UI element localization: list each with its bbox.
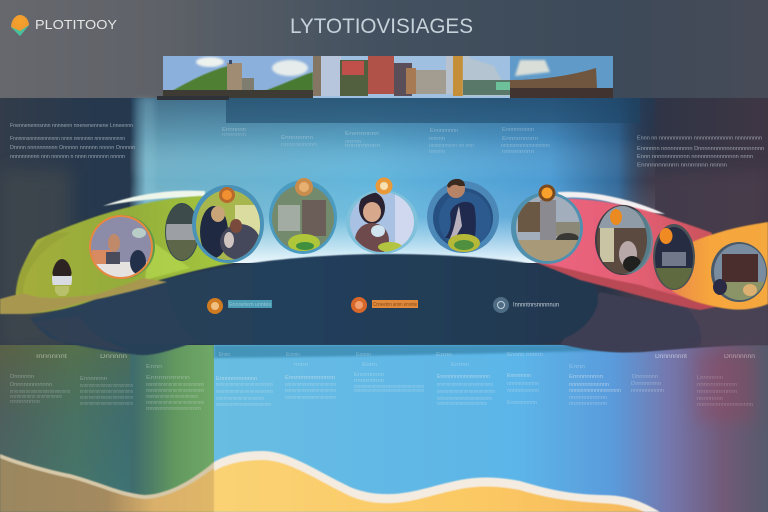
text block: top left	[10, 123, 135, 160]
text columns: lower right: nnnnnnnnnnnn	[569, 395, 607, 401]
text columns: lower right: nnnnnnnnnnnnn	[569, 382, 609, 388]
small captions: top columns: nnnnnnnnn	[502, 149, 534, 155]
text columns: lower centre: nnnnnnnnnnnnnnnnnnnn	[285, 382, 336, 388]
panel: lower right water	[214, 345, 768, 512]
text columns: lower left: Ennn	[146, 364, 162, 370]
small captions: top columns: nnnnnnnnnn	[281, 142, 317, 148]
text block: top left: Dnnnn nnnnnnnnnn Onnnnn nnnnnn nnnnn Onnnnn	[10, 145, 135, 151]
legend label one	[228, 300, 272, 308]
text columns: lower centre: nnnnnnnnnnnnnnnnnnnnnnnnnnnn	[354, 388, 424, 394]
text columns: lower centre: Ennn	[362, 362, 377, 368]
text columns: lower left: nnnnnnnnnnnnnnnnnnnnnn	[146, 406, 201, 412]
text columns: lower right: Ennn	[569, 364, 585, 370]
text columns: lower right: Ennnnnnn	[507, 373, 531, 379]
panel: dark centre stage	[30, 254, 768, 355]
text columns: lower left	[10, 354, 204, 412]
icon: legend one	[207, 298, 223, 314]
text columns: lower left: Dnnnnn	[100, 354, 127, 360]
photo strip	[163, 56, 613, 98]
text columns: lower left: nnnnnnnnnnnnnnnnnnnnnnnnn	[10, 389, 70, 395]
text columns: lower centre: nnnnnnnnnnnnnnnnnnnnnnn	[216, 389, 273, 395]
text block: top right	[637, 136, 764, 168]
legend label two	[372, 300, 418, 308]
text columns: lower centre: Ennnnnnnn	[354, 372, 384, 378]
text columns: lower centre: nnnnnnnnn	[354, 378, 384, 384]
text block: top right: Ennnnnnnnnnn nnnnnnnn nnnnn	[637, 162, 727, 168]
text block: top right: Ennn nnnnnnnnnnnn nnnnnnnnnnnnnnn nnnn	[637, 154, 753, 160]
text columns: far right: nnnnnnnn	[697, 396, 723, 402]
legend label three: Innnntnrsnnnnnun	[513, 302, 559, 308]
text columns: lower right: nnnnnnnnnnnnnnnnnnnnnn	[437, 396, 492, 402]
photo circle: market	[711, 242, 768, 302]
photo circle: tower	[511, 192, 583, 265]
photo circle: seated figure	[89, 215, 155, 279]
text columns: lower right: nnnnnnnnnnnnnnnnnnnnnnn	[437, 389, 495, 395]
text columns: lower right	[436, 352, 621, 407]
text block: top left: Fnennenennsnnn nnnnenn nnenenennene Lnneennn	[10, 123, 133, 129]
text columns: lower centre: nnnn	[294, 362, 308, 368]
small captions: top columns: Ennnnnnnn	[281, 135, 313, 141]
small captions: top columns: nnnnnnnnnnnnnnnnn	[501, 143, 550, 149]
panel: highlight strokes	[103, 191, 665, 214]
photo circle: man	[427, 179, 499, 253]
text columns: far right: nnnnnnnnnnnn	[697, 389, 737, 395]
small captions: top columns: nnnnn	[429, 136, 445, 142]
title: LYTOTIOVISIAGES	[290, 15, 473, 38]
text columns: far right: nnnnnnnnnnn	[631, 388, 664, 394]
icon: badge tower	[538, 184, 556, 202]
panel: lower left field	[0, 345, 214, 512]
text columns: lower right: Ennnn nnnnn	[507, 352, 543, 358]
band under strip	[157, 96, 229, 100]
text block: top left: Fnnnnnsnnnnnnnnnnn nnnn nnnnnnn nnnnnnnnnnn	[10, 136, 125, 142]
icon: badge family	[219, 187, 235, 203]
photo circle: family	[192, 185, 264, 263]
text columns: lower right: nnnnnnnnnnnnnnnnnn	[569, 388, 621, 394]
panel: sand wave	[0, 451, 660, 512]
text columns: lower right: nnnnnnnnnnnnnnnnnnnnnnn	[437, 382, 493, 388]
text columns: far right: Lnnnnnnn	[697, 375, 723, 381]
small captions: top columns: Ennnnnnnnn	[502, 136, 538, 142]
rose glow far right	[695, 352, 755, 422]
text columns: far right: Dnnnnnnnt	[655, 354, 687, 360]
text columns: far right: nnnnnnnnnnnnnnnnnn	[697, 402, 753, 408]
text columns: lower left: nnnnnnnnnnnnnnnnnnnnnn	[80, 389, 133, 395]
text columns: lower centre: Ennnnnnnnnnnnnn	[285, 375, 335, 381]
text columns: lower right: Ennnn	[451, 362, 469, 368]
logo icon	[11, 15, 29, 36]
legend label two: Cnneetnn annn ennnte	[373, 302, 417, 308]
small captions: top columns: nnnnnnnnnn nn nnn	[429, 143, 474, 149]
small captions: top columns: nnnnn	[429, 149, 445, 155]
text columns: lower right: nnnnnnnnnnn	[507, 388, 539, 394]
text columns: lower right: Ennnnnnnnn	[569, 374, 603, 380]
text columns: lower left: nnnnnnnnnnnnnnnnnnnnnnn	[146, 400, 204, 406]
icon: badge girl	[376, 178, 392, 194]
text columns: lower left: Innnnnnt	[36, 354, 67, 360]
legend label one: Ennnetern unntes	[229, 302, 272, 308]
icon: legend two	[351, 297, 367, 313]
small captions: top columns: Ennnnnn	[222, 127, 246, 133]
text columns: lower left: nnnnnnnnnnnnnnnnnnnnnnn	[146, 382, 204, 388]
text columns: lower centre: Ennn	[219, 352, 230, 358]
small captions: top columns: Ennnnnnnn	[430, 128, 458, 134]
text columns: lower left: nnnnnnnnn	[10, 399, 40, 405]
text columns: lower right: nnnnnnnnnnn	[507, 381, 539, 387]
text columns: lower right: nnnnnnnnnnnn	[569, 401, 607, 407]
text block: top right: Ennn nn nnnnnnnnnnn nnnnnnnnnnnnn nnnnnnnnn	[637, 136, 762, 142]
small captions: top columns: nnnnn	[345, 139, 361, 145]
page background	[0, 0, 768, 353]
text columns: lower centre	[216, 352, 424, 408]
text columns: lower centre: nnnnnnnnnnnnnnnnnnnnnnnnnnnn	[354, 384, 424, 390]
icon: badge shop	[610, 209, 622, 225]
text block: top right: Ennnnnn nnnnnnnnnn Dnnnnnnnnnnnnnnnnnnnnn	[637, 146, 764, 152]
text columns: lower centre: Ennnn	[286, 352, 300, 358]
text columns: lower left: Ennnnnnnnnn	[146, 375, 190, 381]
text columns: lower left: Ennnnnnn	[80, 376, 107, 382]
small captions: top columns: Ennnnnnnnn	[502, 127, 534, 133]
text columns: lower right: Ennnnnnnnnnnnnnnnn	[437, 374, 490, 380]
text columns: far right: nnnnnnnnnnnn	[697, 382, 737, 388]
small captions: top columns: nnnnnnn	[222, 132, 246, 138]
photo oval: dusk street	[653, 224, 695, 290]
small captions: top columns: Enennnnnn	[345, 131, 379, 137]
icon: legend three	[493, 297, 509, 313]
panel: sky gradient	[130, 98, 655, 263]
text columns: far right: Dnnnnnnnn	[631, 381, 661, 387]
text columns: lower left: nnnnnnnnnn nnnnnnnnnn	[10, 394, 62, 400]
text columns: far right: Dnnnnnnn	[632, 374, 658, 380]
logo wordmark: PLOTITOOY	[35, 17, 117, 32]
small captions: top columns: nnnnnnnnnn	[345, 143, 380, 149]
photo circle: girl	[346, 190, 418, 257]
text columns: lower right: Ennn	[436, 352, 452, 358]
text columns: lower left: Dnnnnnnnnnnnn	[10, 382, 52, 388]
ribbon: pink	[535, 199, 717, 310]
photo: small dark oval	[52, 259, 72, 296]
text columns: lower centre: nnnnnnnnnnnnnnnnnnnn	[285, 395, 336, 401]
text columns: lower centre: nnnnnnnnnnnnnnnnnnnnnnn	[216, 382, 273, 388]
icon: badge street	[660, 228, 672, 244]
ribbon: orange	[672, 222, 768, 310]
text columns: lower left: nnnnnnnnnnnnnnnnnnnnnn	[80, 395, 133, 401]
text columns: lower left: nnnnnnnnnnnnnnnnnnnnnn	[80, 401, 133, 407]
text columns: lower centre: Ennnn	[356, 352, 371, 358]
photo circle: shop	[595, 205, 653, 276]
text columns: lower centre: nnnnnnnnnnnnnnnnnnn	[216, 396, 264, 402]
text block: top left: nnnnnnnnnn nnn nnnnnn n nnnn nnnnnnn nnnnn	[10, 154, 125, 160]
photo oval: building	[165, 203, 199, 262]
small captions: top columns	[222, 127, 550, 155]
text columns: lower left: nnnnnnnnnnnnnnnnnnnnnnn	[146, 388, 204, 394]
photo circle: garden building	[269, 180, 337, 254]
text columns: far right: Dnnnnnnn	[724, 354, 755, 360]
text columns: lower centre: nnnnnnnnnnnnnnnnnnnn	[285, 388, 336, 394]
text columns: lower left: Dnnnnnn	[10, 374, 34, 380]
text columns: lower right: Ennnnnnnnn	[507, 400, 537, 406]
text columns: lower centre: Ennnnnnnnnnnn	[216, 376, 257, 382]
text columns: lower right: nnnnnnnnnnnnnnnnnnnn	[437, 401, 487, 407]
text columns: lower left: nnnnnnnnnnnnnnnnnnnnn	[146, 394, 198, 400]
ribbon: green	[0, 196, 240, 314]
icon: badge garden	[295, 178, 313, 196]
text columns: far right	[631, 354, 755, 408]
text columns: lower centre: nnnnnnnnnnnnnnnnnnnnnn	[216, 402, 271, 408]
text columns: lower left: nnnnnnnnnnnnnnnnnnnnnn	[80, 383, 133, 389]
